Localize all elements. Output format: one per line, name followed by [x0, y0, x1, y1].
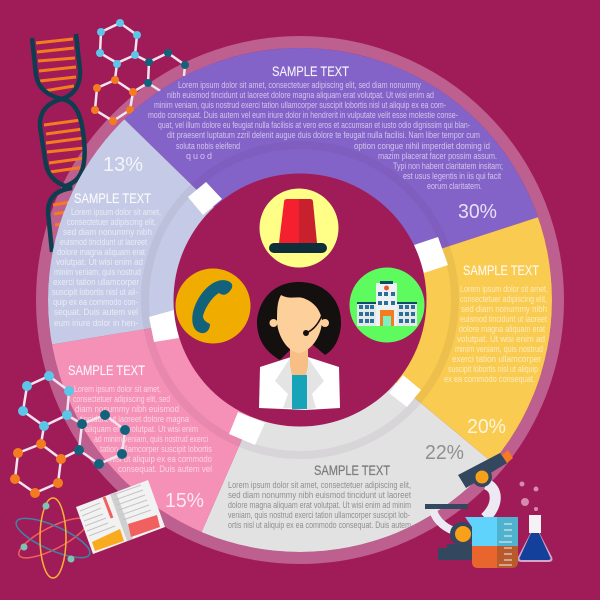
text block: lavender: eum iriure dolor in hen-: [54, 318, 138, 328]
percentage: 15%: 15%: [165, 490, 204, 512]
center circle: [174, 174, 426, 426]
figure: call center operator: [257, 282, 341, 410]
neck: [290, 348, 308, 375]
lapels: [275, 358, 324, 410]
text block: gray: sed diam nonummy nibh euismod tincidunt ut laoreet: [228, 490, 411, 500]
icon: microscope: [425, 450, 513, 560]
text block: yellow: consectetuer adipiscing elit,: [460, 294, 547, 304]
face: [277, 295, 322, 353]
panel: yellow 20% text: [444, 262, 548, 438]
text block: lavender: euismod tincidunt ut laoreet: [60, 237, 147, 247]
text block: yellow: euismod tincidunt ut laoreet: [460, 314, 547, 324]
outer ring: [42, 42, 558, 558]
text block: lavender: sequat. Duis autem vel: [54, 307, 138, 317]
text block: lavender: quip ex ea commodo con-: [53, 297, 138, 307]
text block: lavender: minim veniam, quis nostrud: [54, 267, 141, 277]
text block: purple: mazim placerat facer possim assum.: [378, 151, 497, 161]
shirt: [292, 375, 307, 409]
text block: pink: aliquam erat volutpat. Ut wisi enim: [85, 424, 198, 434]
text block: yellow: Lorem ipsum dolor sit amet,: [460, 284, 548, 294]
text block: purple: minim veniam, quis nostrud exerci tation ullamcorper suscipit lobortis nisl ut aliquip ex ea com-: [154, 100, 446, 110]
text block: purple: dit praesent luptatum zzril delenit augue duis dolore te feugait nulla facilisi. Nam liber tempor cum: [167, 130, 480, 140]
icon: flask: [518, 482, 552, 562]
text block: pink: Lorem ipsum dolor sit amet,: [74, 384, 161, 394]
text block: pink: consequat. Duis autem vel: [118, 464, 212, 474]
text block: gray: [228, 480, 411, 530]
text block: pink: tation ullamcorper suscipit lobortis: [100, 444, 212, 454]
icon: lower-left molecule: [10, 371, 130, 498]
text block: yellow: volutpat. Ut wisi enim ad: [457, 334, 545, 344]
icon: phone: [176, 268, 250, 344]
percentage: 30%: 30%: [458, 201, 497, 223]
panel: purple 30% text: [148, 63, 503, 223]
percentage: 22%: 22%: [425, 442, 464, 464]
text block: purple: eorum claritatem.: [427, 181, 482, 191]
text block: purple: soluta nobis eleifend: [176, 141, 240, 151]
text block: yellow: minim veniam, quis nostrud: [455, 344, 543, 354]
text block: lavender: [52, 207, 161, 328]
text block: yellow: exerci tation ullamcorper: [452, 354, 541, 364]
text block: gray: veniam, quis nostrud exerci tation ullamcorper suscipit lob-: [228, 510, 410, 520]
text block: purple: est usus legentis in iis qui facit: [403, 171, 501, 181]
text block: gray: Lorem ipsum dolor sit amet, consectetuer adipiscing elit,: [228, 480, 411, 490]
panel: pink 15% text: [68, 362, 212, 512]
text block: purple: [148, 80, 503, 191]
text block: pink: consectetuer adipiscing elit, sed: [73, 394, 170, 404]
coat: [259, 357, 340, 410]
text block: yellow: suscipit lobortis nisl ut aliquip: [448, 364, 538, 374]
text block: yellow: ex ea commodo consequat.: [444, 374, 535, 384]
heading: gray: SAMPLE TEXT: [314, 462, 390, 478]
text block: lavender: exerci tation ullamcorper: [53, 277, 139, 287]
text block: purple: Lorem ipsum dolor sit amet, consectetuer adipiscing elit, sed diam nonummy: [178, 80, 421, 90]
text block: purple: quod: [186, 151, 212, 161]
text block: yellow: sed diam nonummy nibh: [461, 304, 547, 314]
text block: purple: modo consequat. Duis autem vel eum iriure dolor in hendrerit in vulputate velit esse molestie conse-: [148, 110, 458, 120]
text block: pink: tincidunt ut laoreet dolore magna: [80, 414, 189, 424]
icon: open book: [76, 480, 165, 554]
text block: lavender: suscipit lobortis nisl ut ali-: [52, 287, 138, 297]
icon: red alarm light: [260, 188, 338, 268]
heading: lavender: SAMPLE TEXT: [74, 190, 151, 206]
text block: pink: diam nonummy nibh euismod: [75, 404, 179, 414]
icon: top molecule: [91, 19, 189, 125]
white slice separators: [149, 182, 448, 445]
text block: purple: option congue nihil imperdiet doming id: [354, 141, 490, 151]
hair: [257, 282, 341, 360]
percentage: 20%: 20%: [467, 416, 506, 438]
text block: yellow: dolore magna aliquam erat: [459, 324, 545, 334]
heading: purple: SAMPLE TEXT: [272, 63, 349, 79]
icon: atom: [12, 498, 94, 578]
text block: purple: Typi non habent claritatem insitam;: [393, 161, 503, 171]
text block: lavender: dolore magna aliquam erat: [57, 247, 145, 257]
text block: lavender: consectetuer adipiscing elit,: [67, 217, 156, 227]
text block: purple: quat, vel illum dolore eu feugiat nulla facilisis at vero eros et accumsan et iusto odio dignissim qui blan-: [158, 120, 470, 130]
text block: lavender: sed diam nonummy nibh: [63, 227, 152, 237]
text block: gray: dolore magna aliquam erat volutpat. Ut wisi enim ad minim: [228, 500, 411, 510]
icon: hospital: [350, 268, 424, 342]
text block: pink: nisl ut aliquip ex ea commodo: [110, 454, 212, 464]
icon: beaker: [465, 517, 518, 568]
headset: [306, 312, 323, 333]
text block: yellow: [444, 284, 548, 384]
percentage: 13%: 13%: [103, 154, 143, 176]
text block: lavender: Lorem ipsum dolor sit amet,: [71, 207, 161, 217]
text block: pink: [73, 384, 212, 474]
panel: lavender 13% text: [52, 154, 161, 328]
panel: gray 22% text: [228, 442, 464, 530]
text block: pink: ad minim veniam, quis nostrud exerci: [94, 434, 208, 444]
text block: lavender: volutpat. Ut wisi enim ad: [56, 257, 143, 267]
heading: pink: SAMPLE TEXT: [68, 362, 145, 378]
text block: gray: ortis nisl ut aliquip ex ea commodo consequat. Duis autem: [228, 520, 411, 530]
donut chart slices: [48, 48, 552, 552]
icon: DNA helix: [32, 34, 85, 252]
heading: yellow: SAMPLE TEXT: [463, 262, 539, 278]
text block: purple: nibh euismod tincidunt ut laoreet dolore magna aliquam erat volutpat. Ut wisi enim ad: [167, 90, 434, 100]
